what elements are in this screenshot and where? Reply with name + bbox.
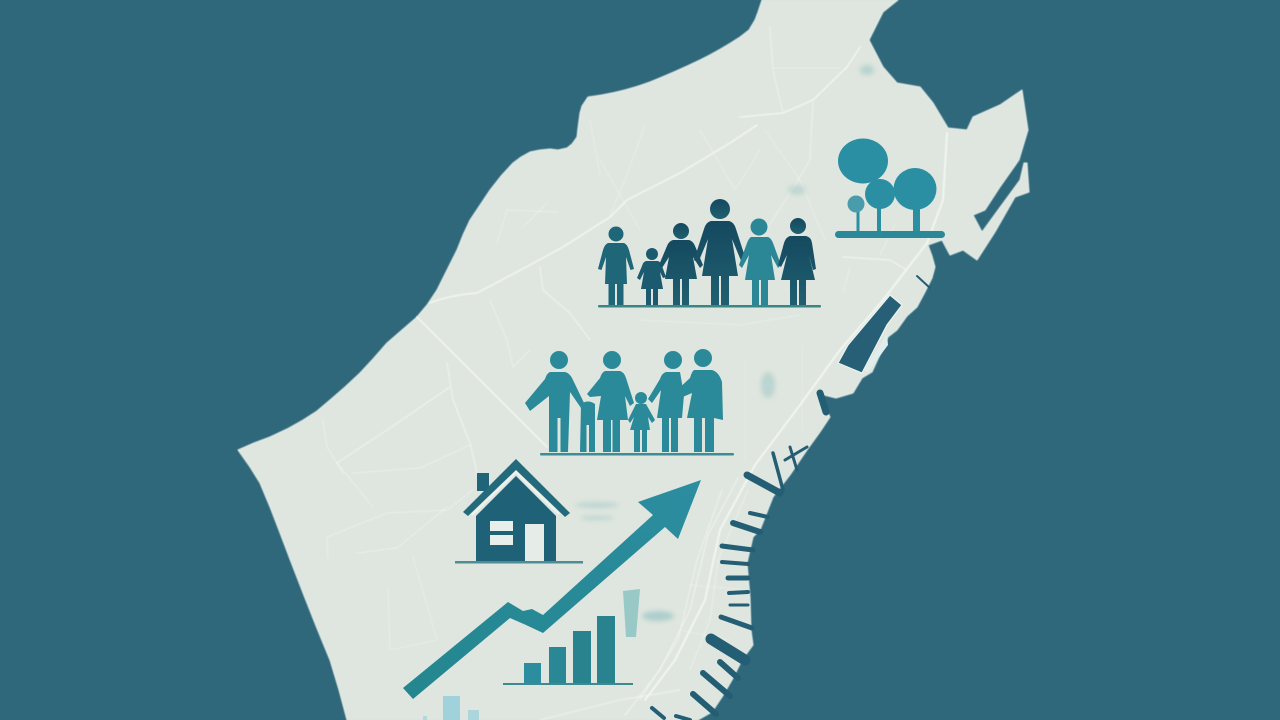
icon: trees on a ground bar: [835, 138, 945, 238]
ground line: [598, 305, 821, 308]
bar 2: [549, 647, 566, 683]
coast: harbour strip: [864, 334, 888, 372]
house body: [476, 476, 556, 561]
baseline: [503, 683, 633, 685]
icon: rising arrow: [403, 480, 701, 699]
person 5 teal: [739, 218, 781, 305]
child left: [580, 402, 595, 452]
roof highlight: [472, 472, 559, 515]
coast: harbour dock: [838, 295, 902, 373]
ground line: [455, 561, 583, 564]
ground line: [540, 453, 734, 456]
map: coastal land mass: [238, 0, 1029, 720]
coast: piers: [652, 276, 930, 720]
bar 3: [573, 631, 591, 683]
bar chart: [503, 589, 640, 685]
window top: [490, 521, 513, 531]
woman centre: [587, 351, 634, 452]
window bottom: [490, 535, 513, 545]
woman right: [648, 351, 684, 452]
person 2 child: [637, 248, 666, 305]
icon: house: [455, 459, 583, 564]
roof: [463, 459, 570, 517]
door: [525, 524, 544, 561]
person 6: [778, 218, 816, 305]
chimney: [477, 473, 489, 491]
bar 4: [597, 616, 615, 683]
man: [525, 351, 585, 452]
pale bars at bottom edge: [423, 696, 479, 720]
bar 1: [524, 663, 541, 683]
person 3: [659, 223, 703, 305]
icon: family of six, dark: [598, 199, 821, 308]
person 4 tall: [694, 199, 746, 305]
woman far right: [675, 349, 723, 452]
map: pale smudges: [575, 65, 874, 621]
map: road network: [323, 27, 947, 720]
child centre: [628, 392, 655, 452]
icon: family of six, teal: [525, 349, 734, 456]
person 1: [598, 226, 634, 305]
faded bar: [623, 589, 640, 637]
